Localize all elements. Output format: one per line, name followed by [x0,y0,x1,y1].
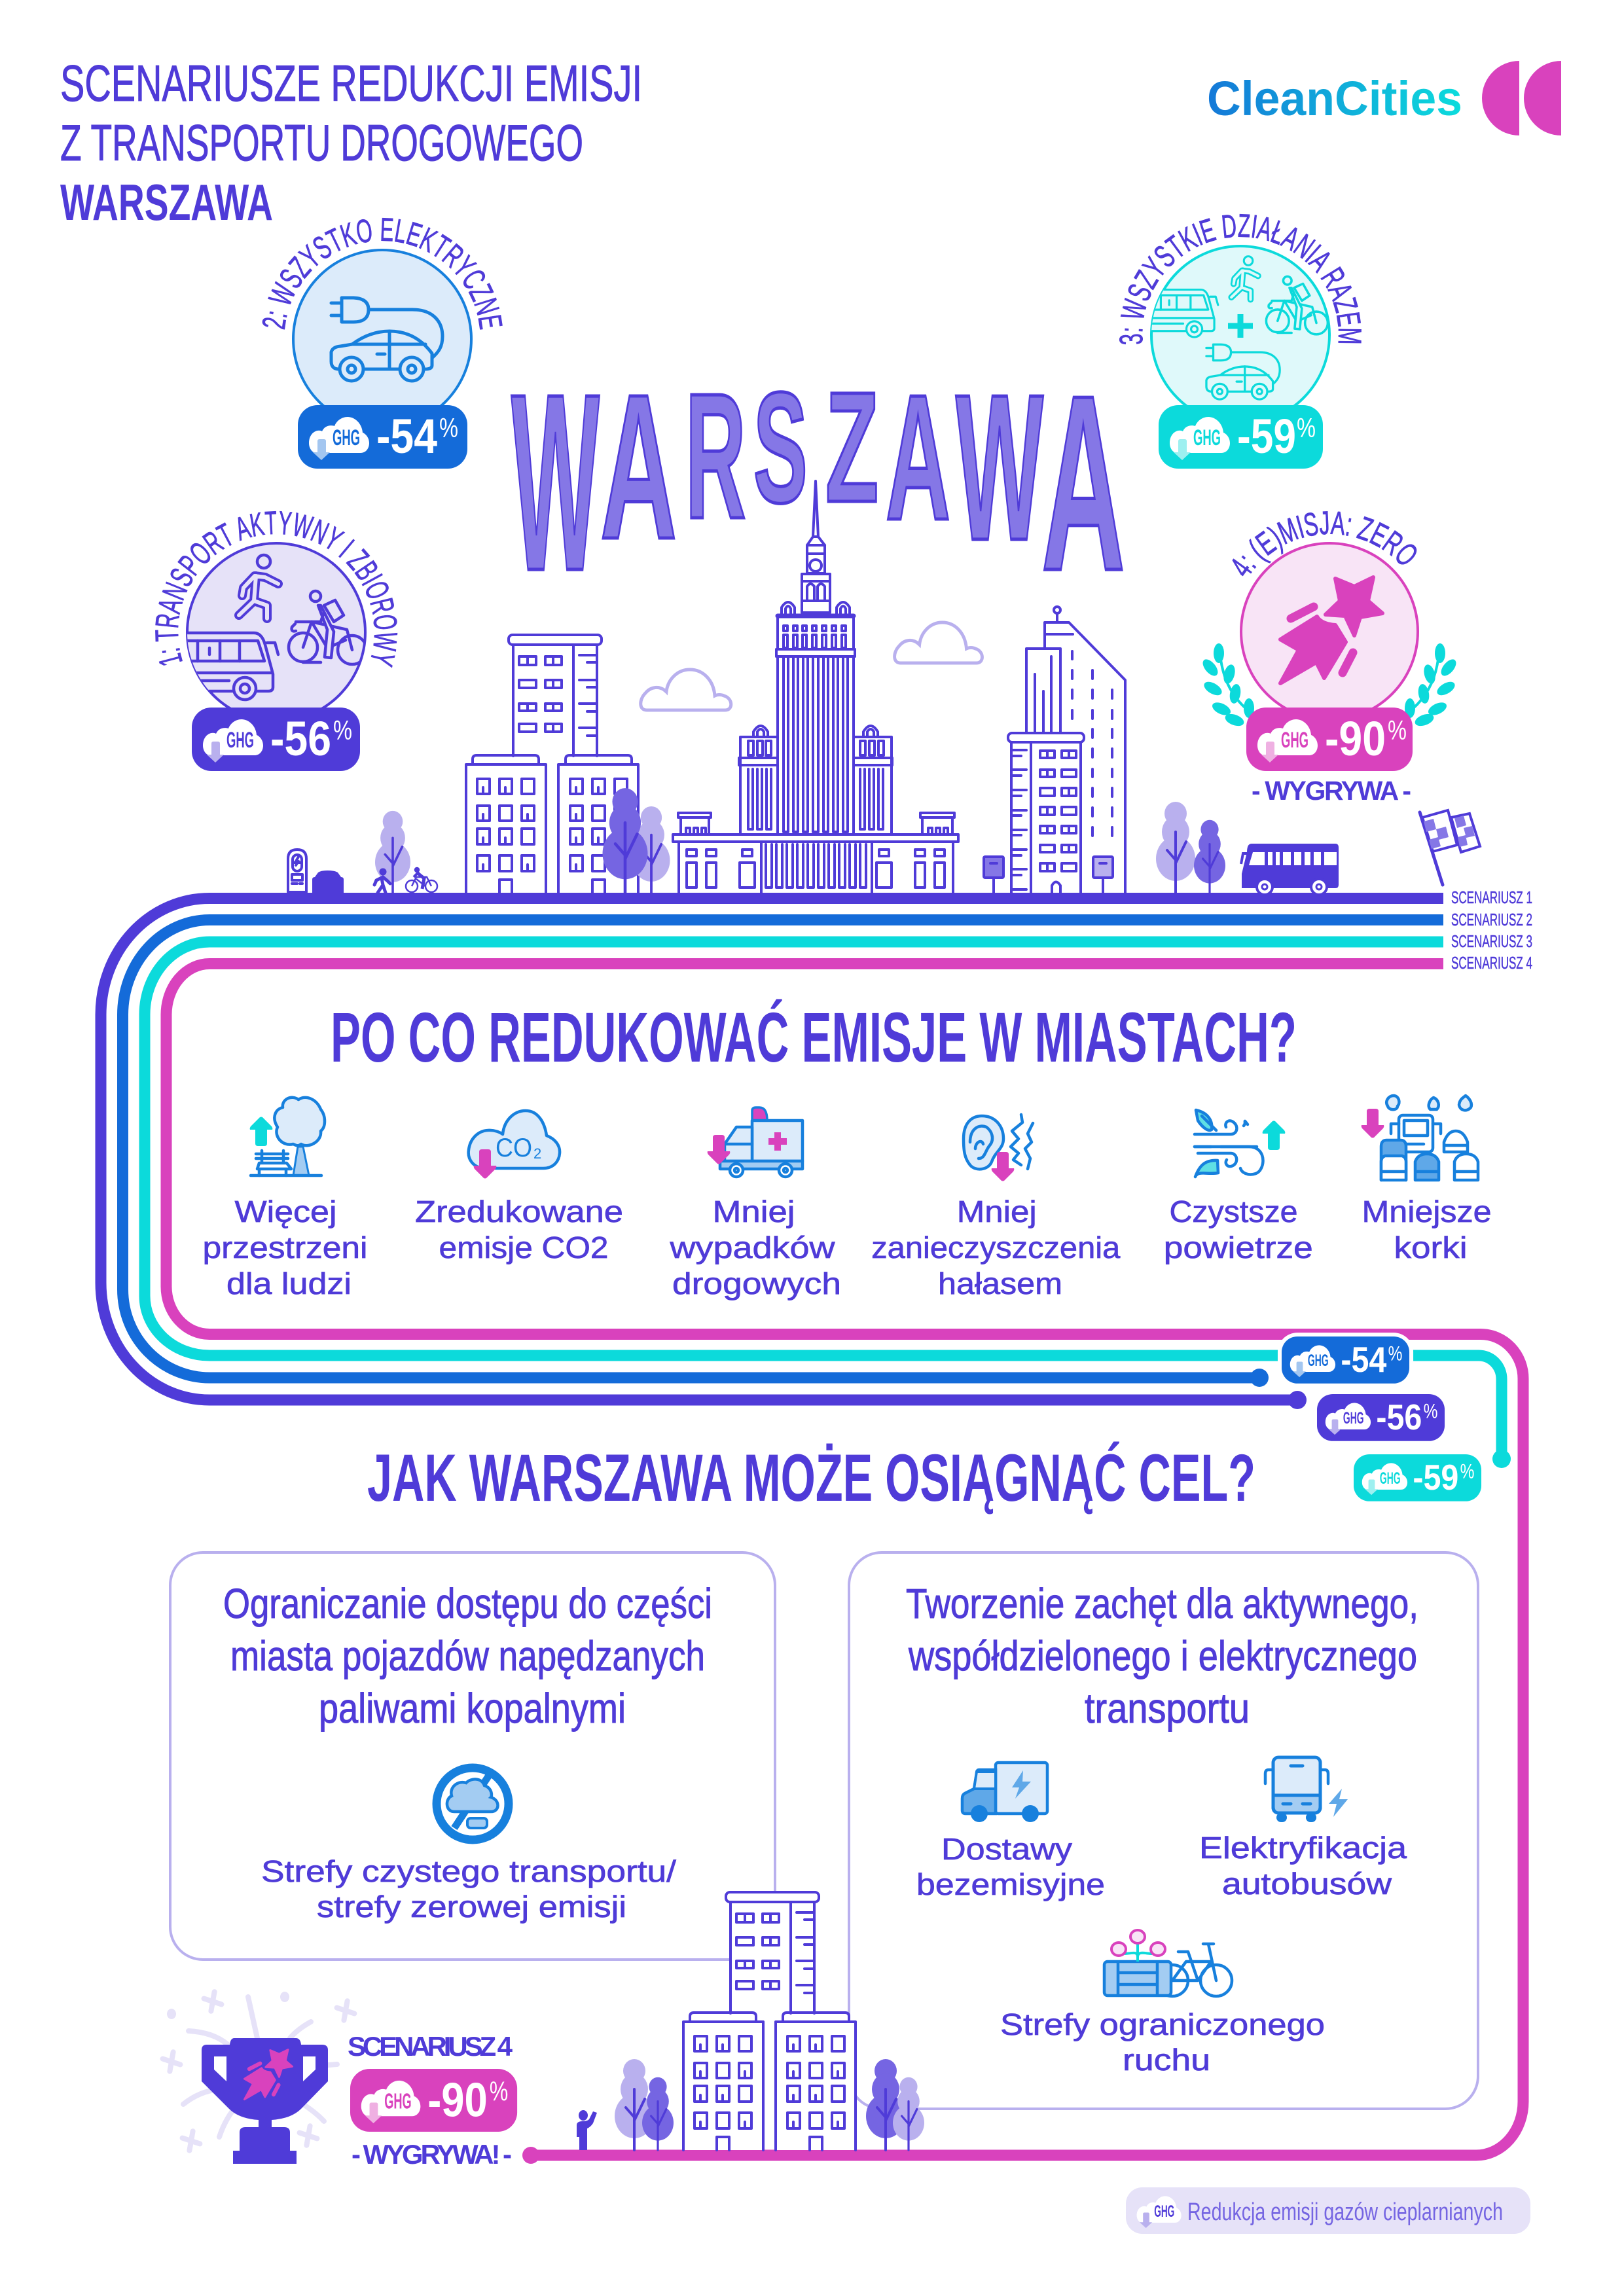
title: WARSZAWA [60,173,273,231]
scenario 2 badge: all electric: GHG [333,425,360,450]
left box text: restricting fossil-fuel vehicles: Ograniczanie dostępu do części [223,1580,712,1627]
label: electrification of buses [1199,1831,1407,1901]
benefit: less noise pollution: zanieczyszczenia [871,1230,1121,1265]
scenario 3 badge: all measures together [1119,213,1362,469]
benefit: reduced CO2 emissions [415,1111,623,1265]
benefit: fewer road accidents [669,1107,841,1300]
benefit: cleaner air: powietrze [1164,1230,1313,1265]
scenario 4 badge: mission zero, winner: 4: (E)MISJA: ZERO [1232,511,1416,576]
winner result badge -90: -90 [427,2073,488,2126]
lower trees [615,2059,924,2150]
label: zero-emission deliveries [916,1832,1105,1901]
scenario 2 badge: all electric: -54 [376,409,437,463]
scenario legend labels: SCENARIUSZ 1 [1451,888,1532,907]
scenario 1 badge: active and public transport: -56 [270,711,331,766]
scenario 2 badge: all electric [262,217,503,469]
benefit: less noise pollution: hałasem [938,1266,1062,1300]
scenario road lines [101,898,1523,2164]
scenario 1 badge: active and public transport: 1: TRANSPORT AKTYWNY I ZBIOROWY [155,511,398,668]
text boxes [170,1552,1478,2109]
legend: greenhouse gas reduction [1126,2187,1530,2234]
winner label: scenario 4: SCENARIUSZ 4 [348,2031,513,2062]
left box text: restricting fossil-fuel vehicles [223,1580,712,1732]
benefit: reduced CO2 emissions: emisje CO2 [439,1230,609,1265]
icon: person waving [577,2110,597,2150]
benefit: more space for people: dla ludzi [226,1266,352,1300]
benefit: reduced CO2 emissions: 2 [533,1145,541,1162]
scenario legend labels: SCENARIUSZ 3 [1451,931,1532,951]
benefit: reduced CO2 emissions: CO [496,1134,532,1162]
lower residential block [683,1892,856,2150]
winner result badge -90: GHG [384,2089,412,2113]
icon: checkered flag [1420,810,1480,885]
street signs [984,857,1113,893]
small result badge -54: -54 [1341,1339,1387,1380]
icon: electric bus [1265,1757,1348,1822]
left box text: restricting fossil-fuel vehicles: miasta pojazdów napędzanych [230,1632,705,1679]
laurel wreath [1200,643,1459,728]
big city name WARSZAWA: S [753,359,808,536]
small result badge -56: -56 [1376,1397,1422,1437]
scenario 4 badge: mission zero, winner [1203,511,1456,806]
winner result badge -90: % [490,2075,508,2107]
right box text: incentives for active, shared and electric transport [906,1580,1418,1732]
legend: greenhouse gas reduction: Redukcja emisji gazów cieplarnianych [1187,2198,1503,2226]
benefit: less traffic: korki [1394,1230,1468,1265]
big city name WARSZAWA: W [956,351,1043,584]
scenario legend labels [1451,888,1532,973]
label: electrification of buses: autobusów [1222,1867,1392,1901]
scenario 1 badge: active and public transport [155,511,398,771]
right box text: incentives for active, shared and electric transport: transportu [1085,1685,1250,1732]
scenario 3 badge: all measures together: GHG [1193,425,1221,450]
big city name WARSZAWA: A [886,357,950,557]
scenario legend labels: SCENARIUSZ 2 [1451,910,1532,929]
title: SCENARIUSZE REDUKCJI EMISJI [60,54,642,112]
logo: Clean Cities [1207,61,1561,135]
icon: pedestrian [374,869,390,893]
label: limited traffic zones: Strefy ograniczonego [1000,2007,1325,2041]
small result badge -54 [1278,1333,1413,1388]
label: clean transport zones: Strefy czystego transportu/ [261,1854,676,1888]
small result badge -56 [1317,1394,1445,1441]
benefit: less traffic: Mniejsze [1362,1194,1491,1229]
big city name WARSZAWA: A [1041,344,1125,623]
icon: bus [1241,844,1339,895]
benefit: less traffic [1362,1096,1491,1265]
benefit: fewer road accidents: Mniej [712,1194,795,1229]
label: limited traffic zones: ruchu [1123,2043,1210,2077]
icon: electric delivery truck [962,1763,1047,1822]
small result badge -59 [1354,1454,1481,1501]
Palace of Culture [673,481,958,893]
scenario 1 badge: active and public transport: GHG [226,728,254,753]
scenario 3 badge: all measures together: 3: WSZYSTKIE DZIAŁANIA RAZEM [1119,213,1362,344]
benefit: fewer road accidents: drogowych [672,1266,841,1300]
benefit: cleaner air [1164,1110,1313,1265]
small result badge -59: GHG [1380,1469,1401,1488]
benefit: less noise pollution: Mniej [957,1194,1037,1229]
label: electrification of buses: Elektryfikacja [1199,1831,1407,1865]
scenario 4 badge: mission zero, winner: -90 [1325,711,1386,766]
scenario 4 badge: mission zero, winner: GHG [1281,728,1308,753]
big city name WARSZAWA: W [511,341,600,623]
small result badge -54: GHG [1308,1352,1329,1370]
scenario 2 badge: all electric: % [439,412,458,443]
benefit: fewer road accidents: wypadków [669,1230,835,1265]
winner label: wins: - WYGRYWA! - [352,2139,512,2170]
small result badge -54: % [1388,1342,1402,1365]
left box text: restricting fossil-fuel vehicles: paliwami kopalnymi [319,1685,626,1732]
scenario 2 badge: all electric: 2: WSZYSTKO ELEKTRYCZNE [262,217,503,330]
label: limited traffic zones [1000,2007,1325,2077]
palace side wings [740,737,892,834]
icon: car [312,870,344,893]
logo: Clean Cities: CleanCities [1207,71,1462,126]
scenario 3 badge: all measures together: -59 [1237,409,1296,463]
city building: residential block [466,635,638,893]
icon: charging station [288,850,306,892]
winner result badge -90 [350,2069,517,2132]
clouds above city [641,622,982,710]
benefit: cleaner air: Czystsze [1169,1194,1297,1229]
big city name WARSZAWA: Z [825,360,878,535]
title [60,54,642,231]
small result badge -59: % [1460,1460,1474,1482]
small result badge -59: -59 [1413,1457,1458,1498]
benefit: more space for people: Więcej [234,1194,336,1229]
big city name WARSZAWA: A [600,352,677,583]
big city name WARSZAWA: R [685,357,746,556]
right box text: incentives for active, shared and electric transport: Tworzenie zachęt dla aktywnego, [906,1580,1418,1627]
icon: no-emission zone sign [437,1768,509,1840]
small result badge -56: % [1424,1400,1437,1422]
label: zero-emission deliveries: bezemisyjne [916,1867,1105,1901]
small result badge -56: GHG [1343,1409,1364,1427]
scenario 4 badge: mission zero, winner: % [1388,715,1407,745]
icon: trophy with sparkles [161,1990,356,2164]
label: zero-emission deliveries: Dostawy [941,1832,1072,1866]
icon: limited traffic zone with planter and bicycle [1104,1930,1232,1996]
benefit: more space for people [203,1098,368,1300]
scenario legend labels: SCENARIUSZ 4 [1451,953,1532,973]
scenario 3 badge: all measures together: % [1297,412,1316,443]
trees on the upper road [375,788,1225,893]
benefit: reduced CO2 emissions: Zredukowane [415,1194,623,1229]
big city name WARSZAWA [511,341,1125,623]
label: clean transport zones: strefy zerowej emisji [317,1890,626,1924]
benefit: more space for people: przestrzeni [203,1230,368,1265]
icon: cyclist [406,868,437,892]
skyscraper [1008,607,1125,893]
scenario 1 badge: active and public transport: % [333,715,352,745]
legend: greenhouse gas reduction: GHG [1154,2202,1174,2221]
title: Z TRANSPORTU DROGOWEGO [60,114,583,171]
right box text: incentives for active, shared and electric transport: współdzielonego i elektrycznego [908,1632,1417,1679]
benefit: less noise pollution [871,1115,1121,1300]
label: clean transport zones [261,1854,676,1924]
scenario 4 badge: mission zero, winner: - WYGRYWA - [1252,776,1411,806]
